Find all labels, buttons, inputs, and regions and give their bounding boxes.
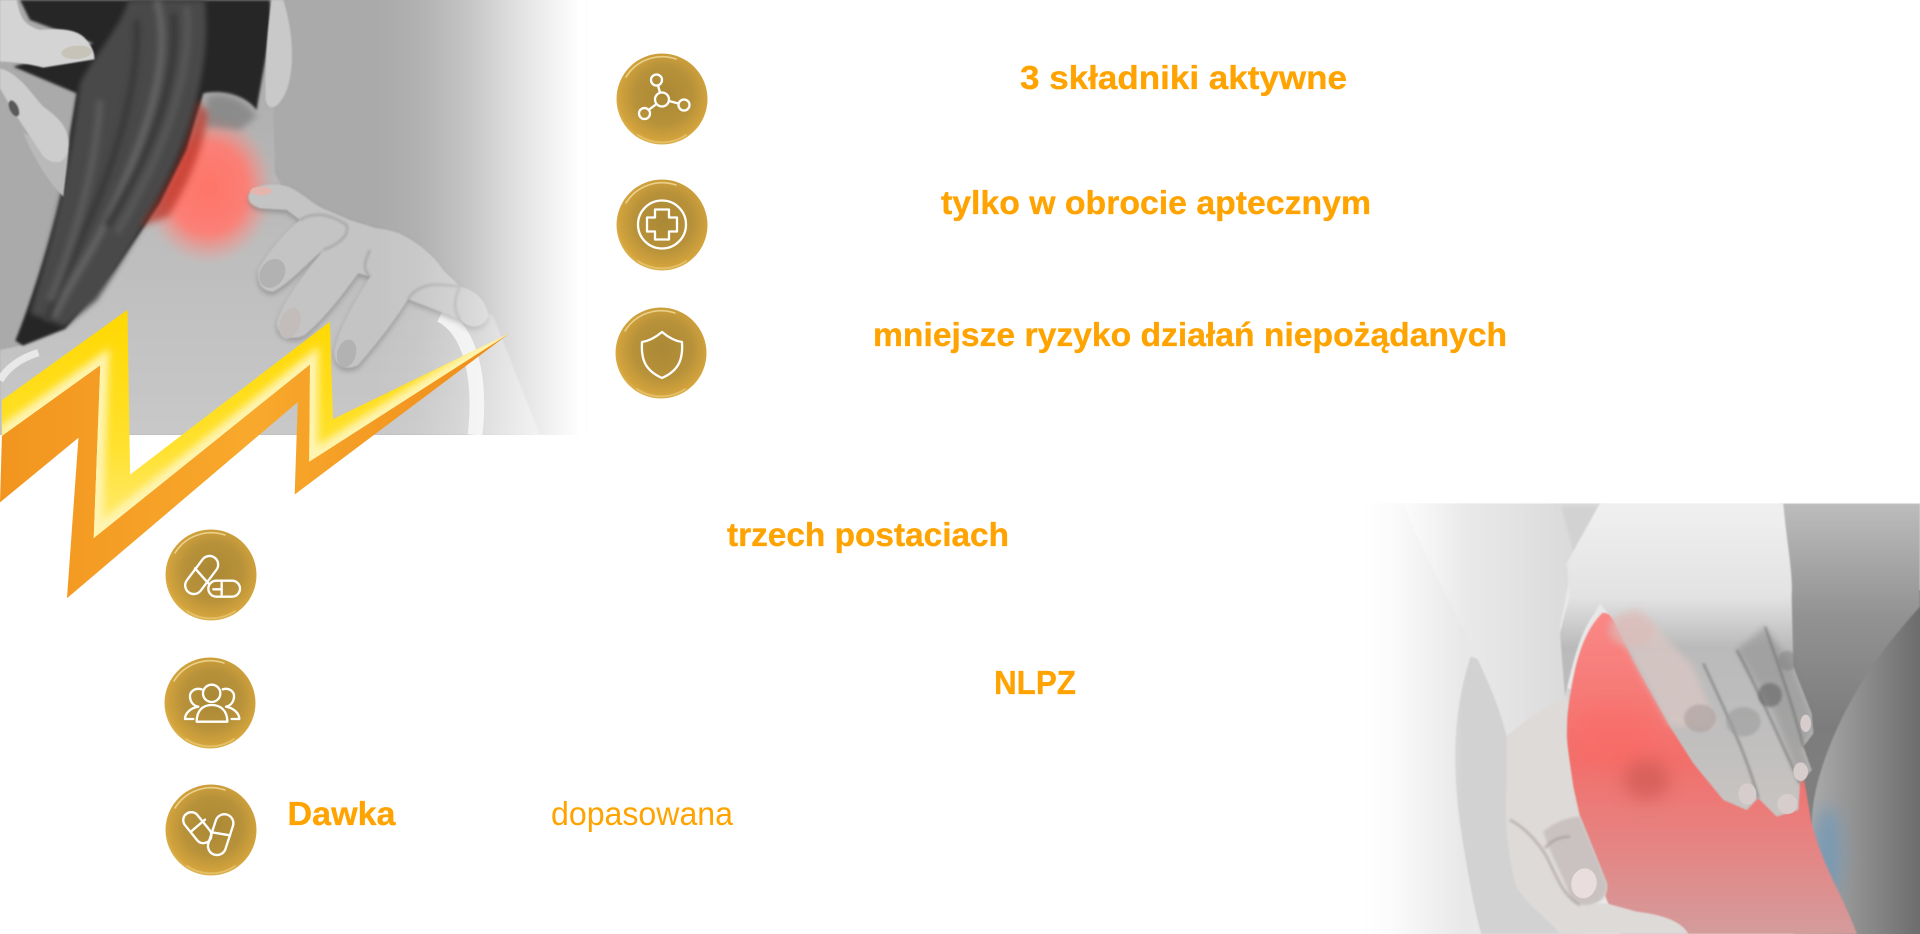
right ear [266, 0, 292, 107]
icon: two capsules [166, 784, 256, 876]
red knee [1567, 613, 1857, 934]
photo: knee pain [1360, 503, 1920, 934]
right strap [441, 315, 477, 435]
icon: shield [616, 308, 706, 398]
forearm [1478, 504, 1569, 736]
knuckles [1684, 651, 1797, 736]
left side fade to white [1360, 503, 1463, 934]
fingertip nails [1738, 715, 1811, 814]
neck shading under hairline [207, 95, 257, 130]
lightning bolt [0, 310, 509, 598]
text: dose: Dawka [288, 795, 396, 832]
red pain glow [155, 120, 270, 259]
dark background right of knee [1793, 590, 1920, 934]
thumb [1543, 817, 1607, 905]
fingernails [250, 187, 359, 369]
photo: woman holding painful neck [0, 0, 590, 435]
neck and shoulders skin [0, 131, 532, 435]
left ear and neck [0, 68, 68, 197]
icon: capsule and tablet [166, 530, 256, 620]
text: adjusted: dopasowana [551, 795, 734, 832]
dark hair mass [13, 0, 270, 346]
lower left leg [1455, 657, 1580, 934]
finger creases [1703, 627, 1803, 798]
left strap [0, 353, 38, 380]
icon: molecule, 3 active ingredients [616, 54, 708, 144]
text: 3 active ingredients: 3 składniki aktywne [1020, 59, 1347, 96]
hand silhouette [248, 184, 488, 368]
upper hand [1560, 503, 1813, 817]
hand silhouette [1560, 503, 1813, 817]
icon: group of people [164, 658, 256, 748]
hand on shoulder [248, 184, 488, 371]
hair streaks [47, 0, 188, 320]
raised hand [0, 0, 94, 68]
blue reflection [1813, 807, 1843, 900]
icon: medical cross [616, 180, 708, 270]
text: pharmacy only: tylko w obrocie aptecznym [941, 184, 1371, 221]
hand shadow [248, 187, 488, 371]
gap between forearm and hand [1560, 504, 1599, 552]
palm [1506, 697, 1688, 934]
right side fade to white [420, 0, 580, 435]
dark red shade beside hair [140, 100, 208, 227]
warm tint on first finger [1622, 610, 1709, 729]
ponytail [30, 0, 206, 327]
thumbnail [1569, 866, 1599, 900]
palm creases [1510, 820, 1580, 905]
text: NSAID: NLPZ [994, 664, 1076, 701]
lower hand [1506, 697, 1688, 934]
pale glow on lower bolt edge [2, 334, 509, 538]
text: lower risk of side effects: mniejsze ryzyko działań niepożądanych [873, 316, 1507, 353]
upper right thigh [1781, 504, 1920, 823]
raised hand fingernail [62, 46, 92, 59]
text: three forms: trzech postaciach [727, 516, 1009, 553]
pink tint near knee [1608, 613, 1655, 647]
bright red patch [1573, 707, 1653, 767]
kneecap shadow [1623, 760, 1670, 800]
hand creases [300, 215, 460, 320]
darker outer fingers [1737, 627, 1813, 783]
